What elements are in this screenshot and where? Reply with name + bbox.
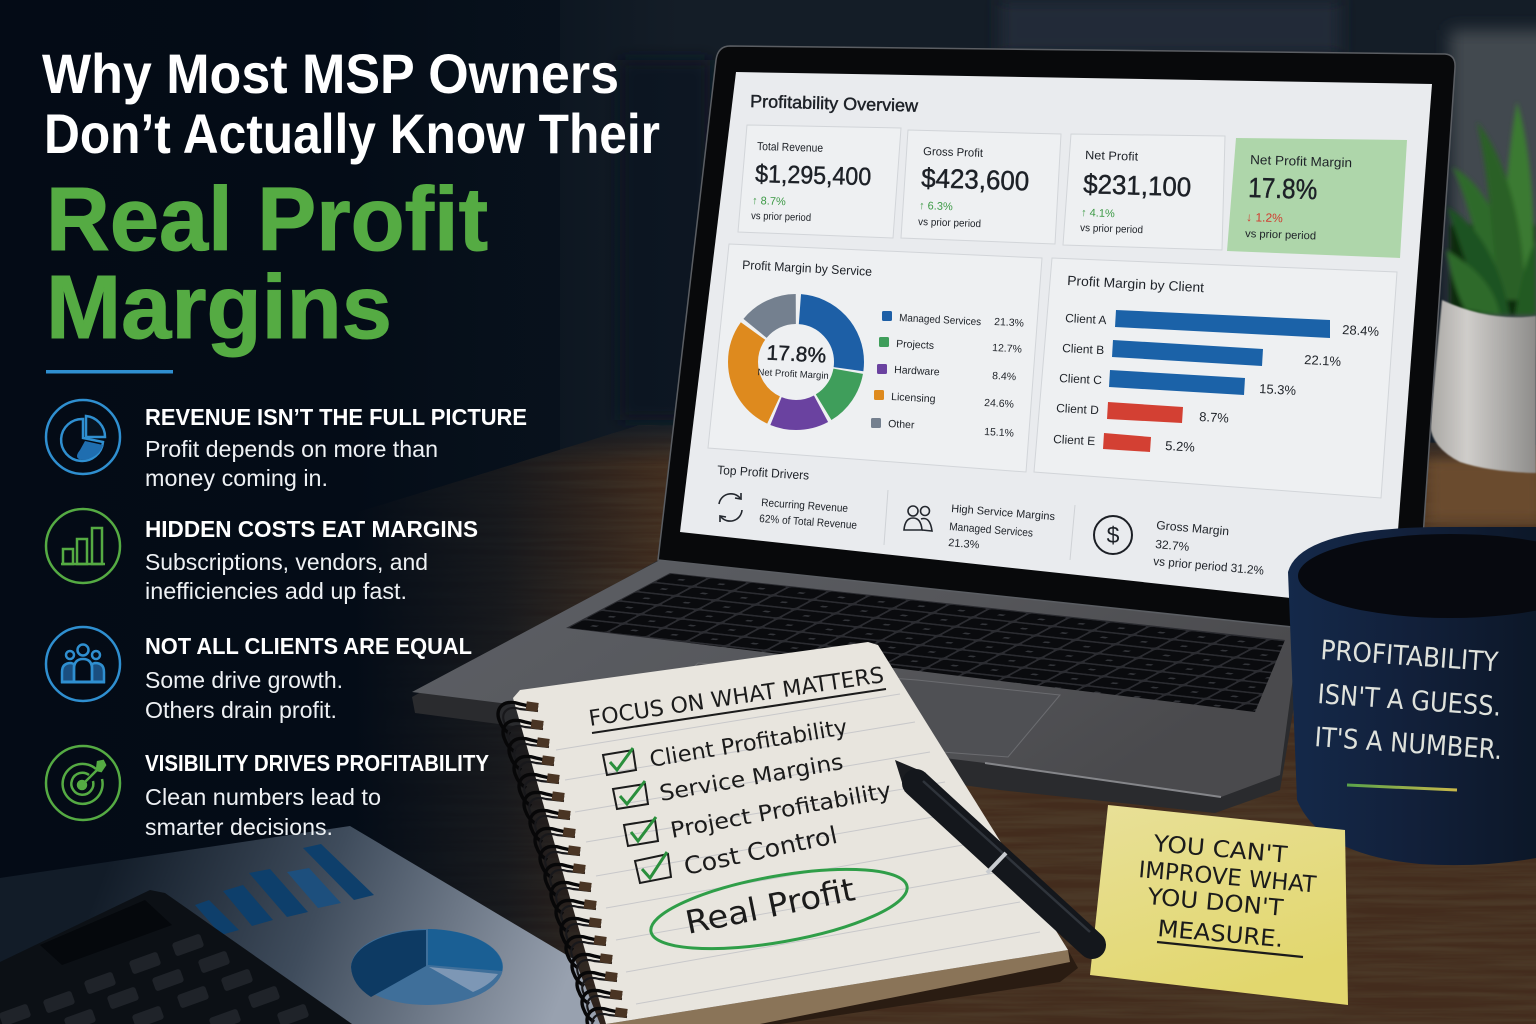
client bar chart: 8.7%: [1199, 409, 1230, 426]
card: net profit: [1063, 134, 1225, 250]
sticky note: MEASURE.: [1156, 916, 1284, 953]
donut chart: 17.8%: [766, 341, 827, 368]
item: visibility drives profitability: Clean numbers lead to: [145, 784, 381, 810]
title: Don’t Actually Know Their: [44, 102, 660, 165]
client bar chart: Client D: [1056, 401, 1100, 417]
sticky note: YOU CAN'T: [1151, 831, 1289, 869]
item: hidden costs eat margins: HIDDEN COSTS EAT MARGINS: [145, 516, 478, 542]
donut legend: 12.7%: [992, 342, 1022, 356]
section: top profit drivers: vs prior period 31.2%: [1153, 554, 1265, 578]
panel: profit margin by service: Profit Margin by Service: [742, 258, 872, 279]
item: not all clients are equal: NOT ALL CLIENTS ARE EQUAL: [145, 633, 472, 659]
item: hidden costs eat margins: [46, 509, 478, 604]
green check marks: [610, 748, 667, 878]
paper bar chart: [195, 844, 374, 935]
checklist: Client Profitability: [648, 715, 849, 773]
laptop screen dashboard: [680, 72, 1432, 609]
card: total revenue: vs prior period: [751, 210, 811, 224]
item: visibility drives profitability: smarter decisions.: [145, 814, 333, 840]
pen: [895, 760, 1092, 945]
mug slogan: IT'S A NUMBER.: [1314, 722, 1503, 766]
client bar chart: Client A: [1065, 311, 1107, 327]
client bar chart: [1053, 310, 1380, 455]
donut legend: Hardware: [894, 364, 940, 378]
client bar chart: 22.1%: [1304, 352, 1342, 369]
dark navy gradient behind the text column: [0, 0, 680, 1024]
card: gross profit: ↑ 6.3%: [919, 200, 953, 213]
item: revenue isn't the full picture: REVENUE ISN’T THE FULL PICTURE: [145, 404, 527, 430]
mug opening: [1298, 534, 1536, 618]
icon: people: [904, 506, 932, 531]
checklist: [603, 715, 893, 883]
notebook heading: FOCUS ON WHAT MATTERS: [587, 663, 886, 732]
mug slogan: ISN'T A GUESS.: [1317, 679, 1502, 723]
donut chart: [743, 309, 849, 415]
section: top profit drivers: 32.7%: [1155, 537, 1190, 554]
item: visibility drives profitability: VISIBILITY DRIVES PROFITABILITY: [145, 750, 489, 776]
section: top profit drivers: Managed Services: [949, 521, 1034, 540]
card: total revenue: [738, 125, 901, 238]
calculator: [0, 890, 352, 1024]
card: net profit margin highlighted: [1227, 138, 1407, 258]
card: total revenue: Total Revenue: [757, 141, 823, 155]
panel: profit margin by service: [708, 244, 1042, 472]
donut legend: Other: [888, 418, 915, 431]
laptop: [412, 46, 1455, 813]
item: not all clients are equal: [46, 627, 472, 723]
title: Margins: [46, 258, 392, 358]
card: net profit: $231,100: [1083, 169, 1192, 202]
checklist: Service Margins: [658, 750, 845, 807]
card: net profit: Net Profit: [1085, 148, 1139, 164]
donut legend: 21.3%: [994, 316, 1024, 330]
section: top profit drivers: Top Profit Drivers: [717, 463, 809, 483]
donut legend: 15.1%: [984, 426, 1014, 440]
client bar chart: 5.2%: [1165, 438, 1196, 455]
dashboard title: Profitability Overview: [750, 91, 919, 116]
card: net profit margin highlighted: vs prior period: [1245, 228, 1316, 242]
icon: dollar circle: $: [1107, 522, 1120, 548]
title: Real Profit: [46, 170, 488, 270]
icon: target with arrow: [46, 746, 120, 820]
keyboard: [566, 573, 1285, 712]
section: top profit drivers: [717, 463, 1265, 578]
section: top profit drivers: 21.3%: [948, 537, 980, 551]
card: net profit: ↑ 4.1%: [1081, 207, 1115, 220]
client bar chart: 28.4%: [1342, 322, 1380, 339]
notebook: [498, 642, 1078, 1024]
section: top profit drivers: High Service Margins: [951, 503, 1056, 523]
item: visibility drives profitability: [46, 746, 489, 840]
donut legend: Projects: [896, 338, 934, 352]
panel: profit margin by client: Profit Margin by Client: [1067, 273, 1205, 295]
item: hidden costs eat margins: Subscriptions, vendors, and: [145, 549, 428, 575]
panel: profit margin by client: [1034, 258, 1397, 498]
notebook cover and page thickness: [606, 950, 1078, 1024]
sticky note: YOU DON'T: [1145, 884, 1285, 922]
spiral binding: [498, 701, 628, 1024]
wooden desk: [420, 425, 1536, 1024]
ruled lines: [556, 694, 1040, 1004]
card: net profit margin highlighted: 17.8%: [1248, 172, 1318, 205]
checklist: Project Profitability: [669, 778, 893, 844]
mug slogan: [1314, 635, 1503, 766]
screen bezel: [658, 46, 1455, 640]
icon: refresh arrows: [719, 493, 742, 522]
card: gross profit: Gross Profit: [923, 146, 984, 160]
title: [42, 42, 660, 358]
coffee mug: [1288, 527, 1536, 865]
client bar chart: Client C: [1059, 371, 1103, 387]
item: revenue isn't the full picture: money coming in.: [145, 465, 328, 491]
accent rule: [46, 370, 173, 374]
sticky note: [1090, 805, 1348, 1005]
title: Why Most MSP Owners: [42, 42, 619, 105]
section: top profit drivers: Recurring Revenue: [761, 497, 848, 515]
laptop base: [412, 558, 1295, 813]
card: total revenue: $1,295,400: [755, 160, 872, 191]
white pot: [1430, 300, 1536, 473]
donut legend: 24.6%: [984, 397, 1014, 411]
notebook page: [513, 642, 1068, 1024]
card: gross profit: [901, 130, 1061, 244]
card: net profit: vs prior period: [1080, 222, 1143, 236]
icon: bar chart: [46, 509, 120, 583]
circled real profit: Real Profit: [682, 870, 858, 942]
report paper with charts: [0, 826, 600, 1024]
section: top profit drivers: 62% of Total Revenue: [759, 513, 857, 532]
plant in a white pot: [1430, 102, 1536, 473]
item: hidden costs eat margins: inefficiencies add up fast.: [145, 578, 407, 604]
mug slogan: PROFITABILITY: [1320, 635, 1500, 678]
checklist: Cost Control: [681, 821, 840, 881]
client bar chart: Client E: [1053, 432, 1096, 448]
paper pie chart: [351, 929, 503, 1005]
card: gross profit: $423,600: [921, 163, 1030, 196]
donut legend: Managed Services: [899, 312, 981, 328]
client bar chart: Client B: [1062, 341, 1105, 357]
item: revenue isn't the full picture: Profit depends on more than: [145, 436, 438, 462]
icon: pie chart: [46, 400, 120, 474]
donut legend: 8.4%: [992, 370, 1016, 383]
circled real profit: [645, 854, 913, 964]
card: net profit margin highlighted: ↓ 1.2%: [1246, 210, 1283, 225]
card: total revenue: ↑ 8.7%: [752, 195, 786, 208]
item: not all clients are equal: Others drain profit.: [145, 697, 337, 723]
donut legend: [871, 311, 1024, 440]
icon: people group: [46, 627, 120, 701]
item: not all clients are equal: Some drive growth.: [145, 667, 343, 693]
item: revenue isn't the full picture: [46, 400, 527, 491]
card: gross profit: vs prior period: [918, 216, 981, 230]
donut chart: Net Profit Margin: [757, 367, 829, 382]
icon: dollar circle: [1094, 516, 1132, 554]
donut legend: Licensing: [891, 391, 936, 405]
trackpad: [680, 663, 1060, 757]
card: net profit margin highlighted: Net Profit Margin: [1250, 152, 1352, 170]
sticky note: IMPROVE WHAT: [1137, 857, 1318, 899]
checkboxes: [603, 750, 671, 883]
client bar chart: 15.3%: [1259, 381, 1297, 398]
section: top profit drivers: Gross Margin: [1156, 518, 1230, 538]
